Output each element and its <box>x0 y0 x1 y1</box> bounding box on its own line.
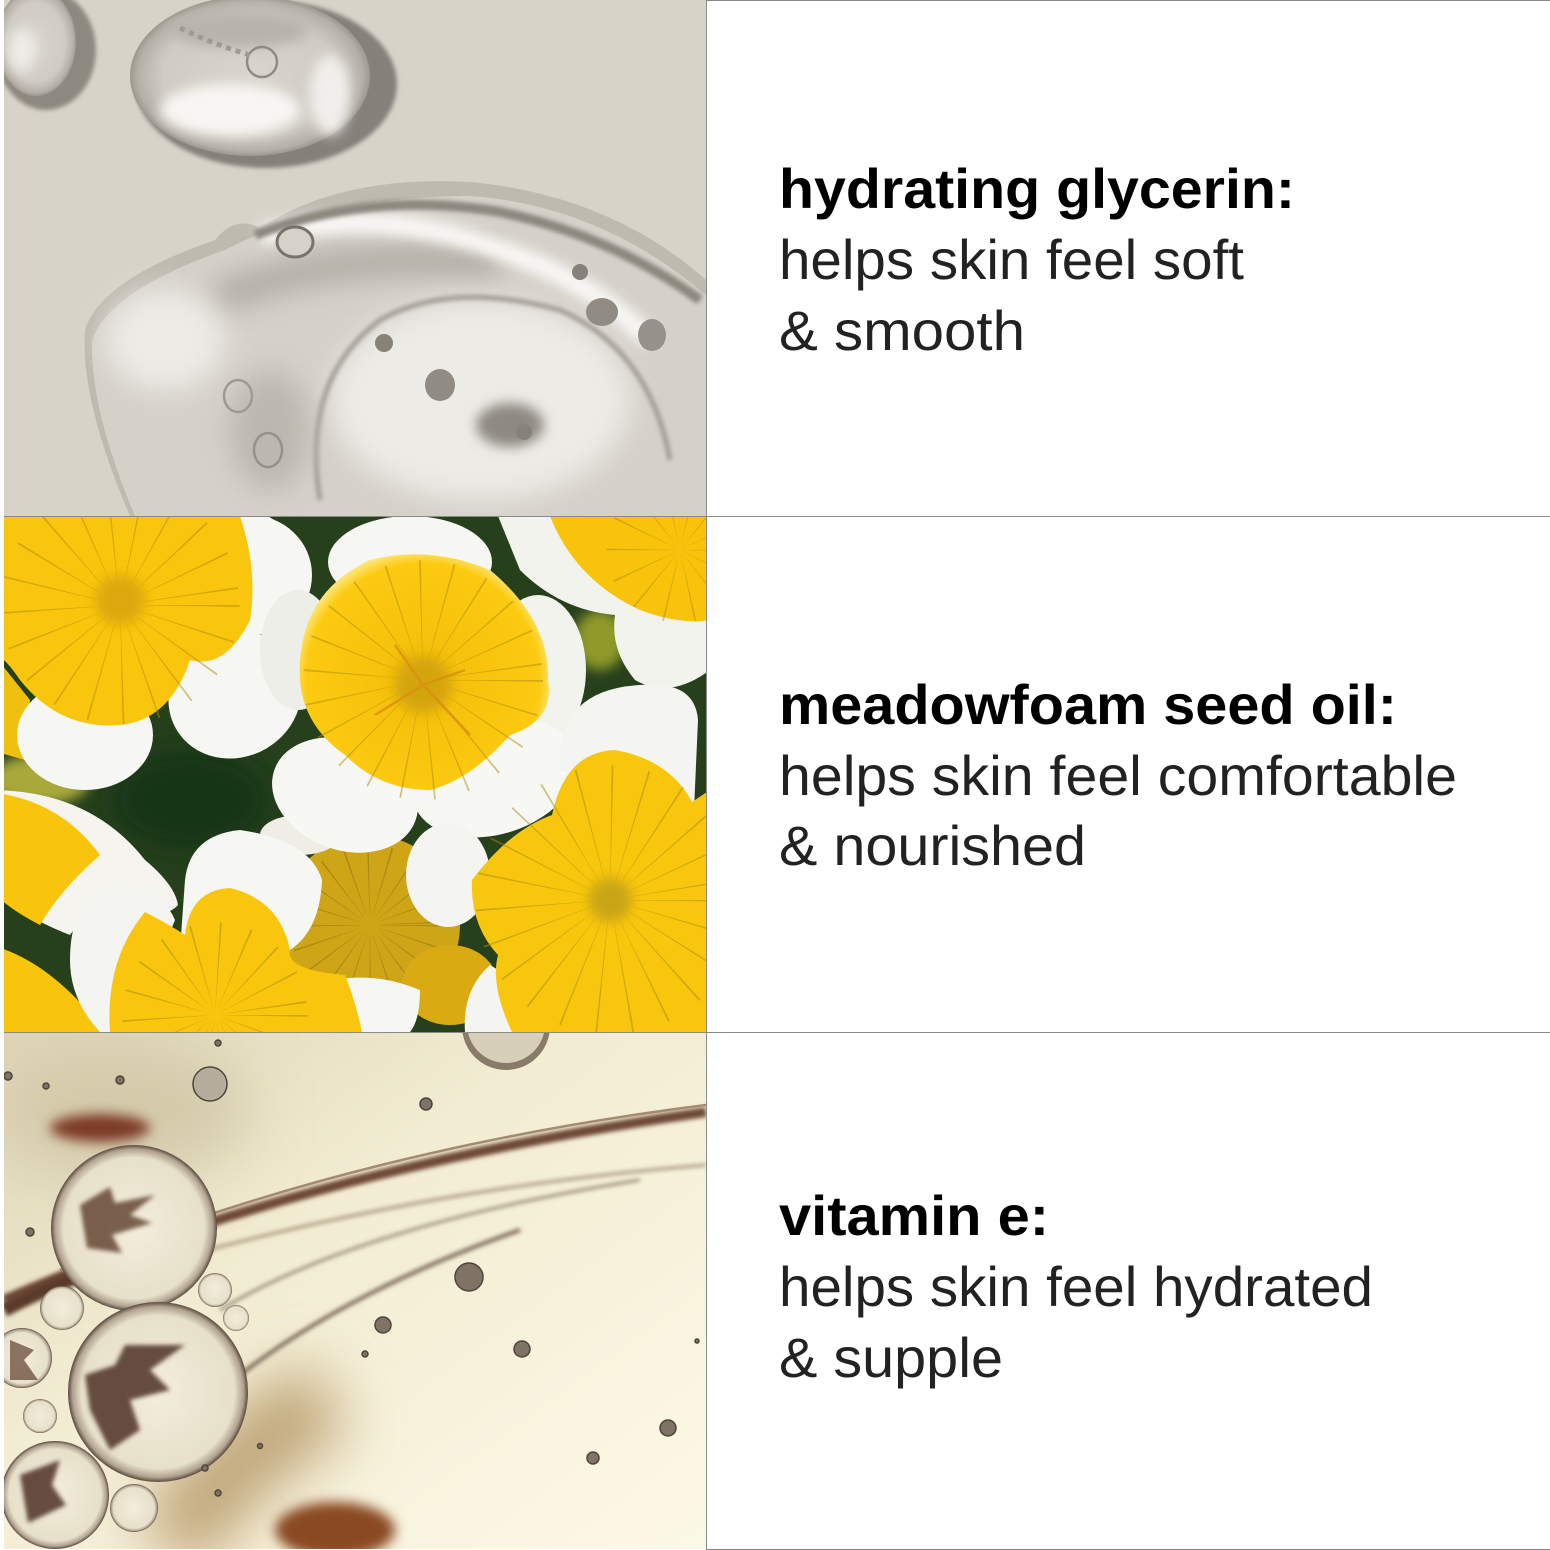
flower: bottom left small <box>0 650 178 1032</box>
text block: hydrating glycerin <box>779 157 1295 362</box>
large bubbles <box>0 982 550 1549</box>
body line: & supple: & supple <box>779 1326 1003 1389</box>
oil streaks <box>4 1105 706 1375</box>
gel droplet top centre <box>130 0 397 168</box>
body line: helps skin feel comfortable: helps skin feel comfortable <box>779 744 1457 807</box>
flower: top right <box>498 512 718 688</box>
gel droplet top left <box>0 0 96 110</box>
flower: top left <box>0 504 325 790</box>
text block: vitamin e <box>779 1184 1373 1389</box>
body line: & nourished: & nourished <box>779 814 1086 877</box>
body line: helps skin feel soft: helps skin feel soft <box>779 228 1244 291</box>
body line: & smooth: & smooth <box>779 299 1025 362</box>
flower: right <box>406 684 710 1032</box>
photo: meadowfoam flowers <box>4 517 706 1032</box>
photo: glycerin gel droplets <box>4 0 706 516</box>
heading: vitamin e: vitamin e: <box>779 1184 1049 1247</box>
flower: centre <box>256 516 593 872</box>
large gel swirl <box>85 181 706 516</box>
flower: bottom left <box>70 830 420 1065</box>
flower: lower middle background <box>260 815 498 1025</box>
heading: hydrating glycerin: hydrating glycerin: <box>779 157 1295 220</box>
text block: meadowfoam seed oil <box>779 673 1457 877</box>
photo: vitamin e oil bubbles <box>4 1033 706 1549</box>
body line: helps skin feel hydrated: helps skin feel hydrated <box>779 1255 1373 1318</box>
dark blurred oil reflections <box>50 1114 395 1550</box>
heading: meadowfoam seed oil: meadowfoam seed oil: <box>779 673 1397 736</box>
small bubbles <box>4 1040 699 1496</box>
